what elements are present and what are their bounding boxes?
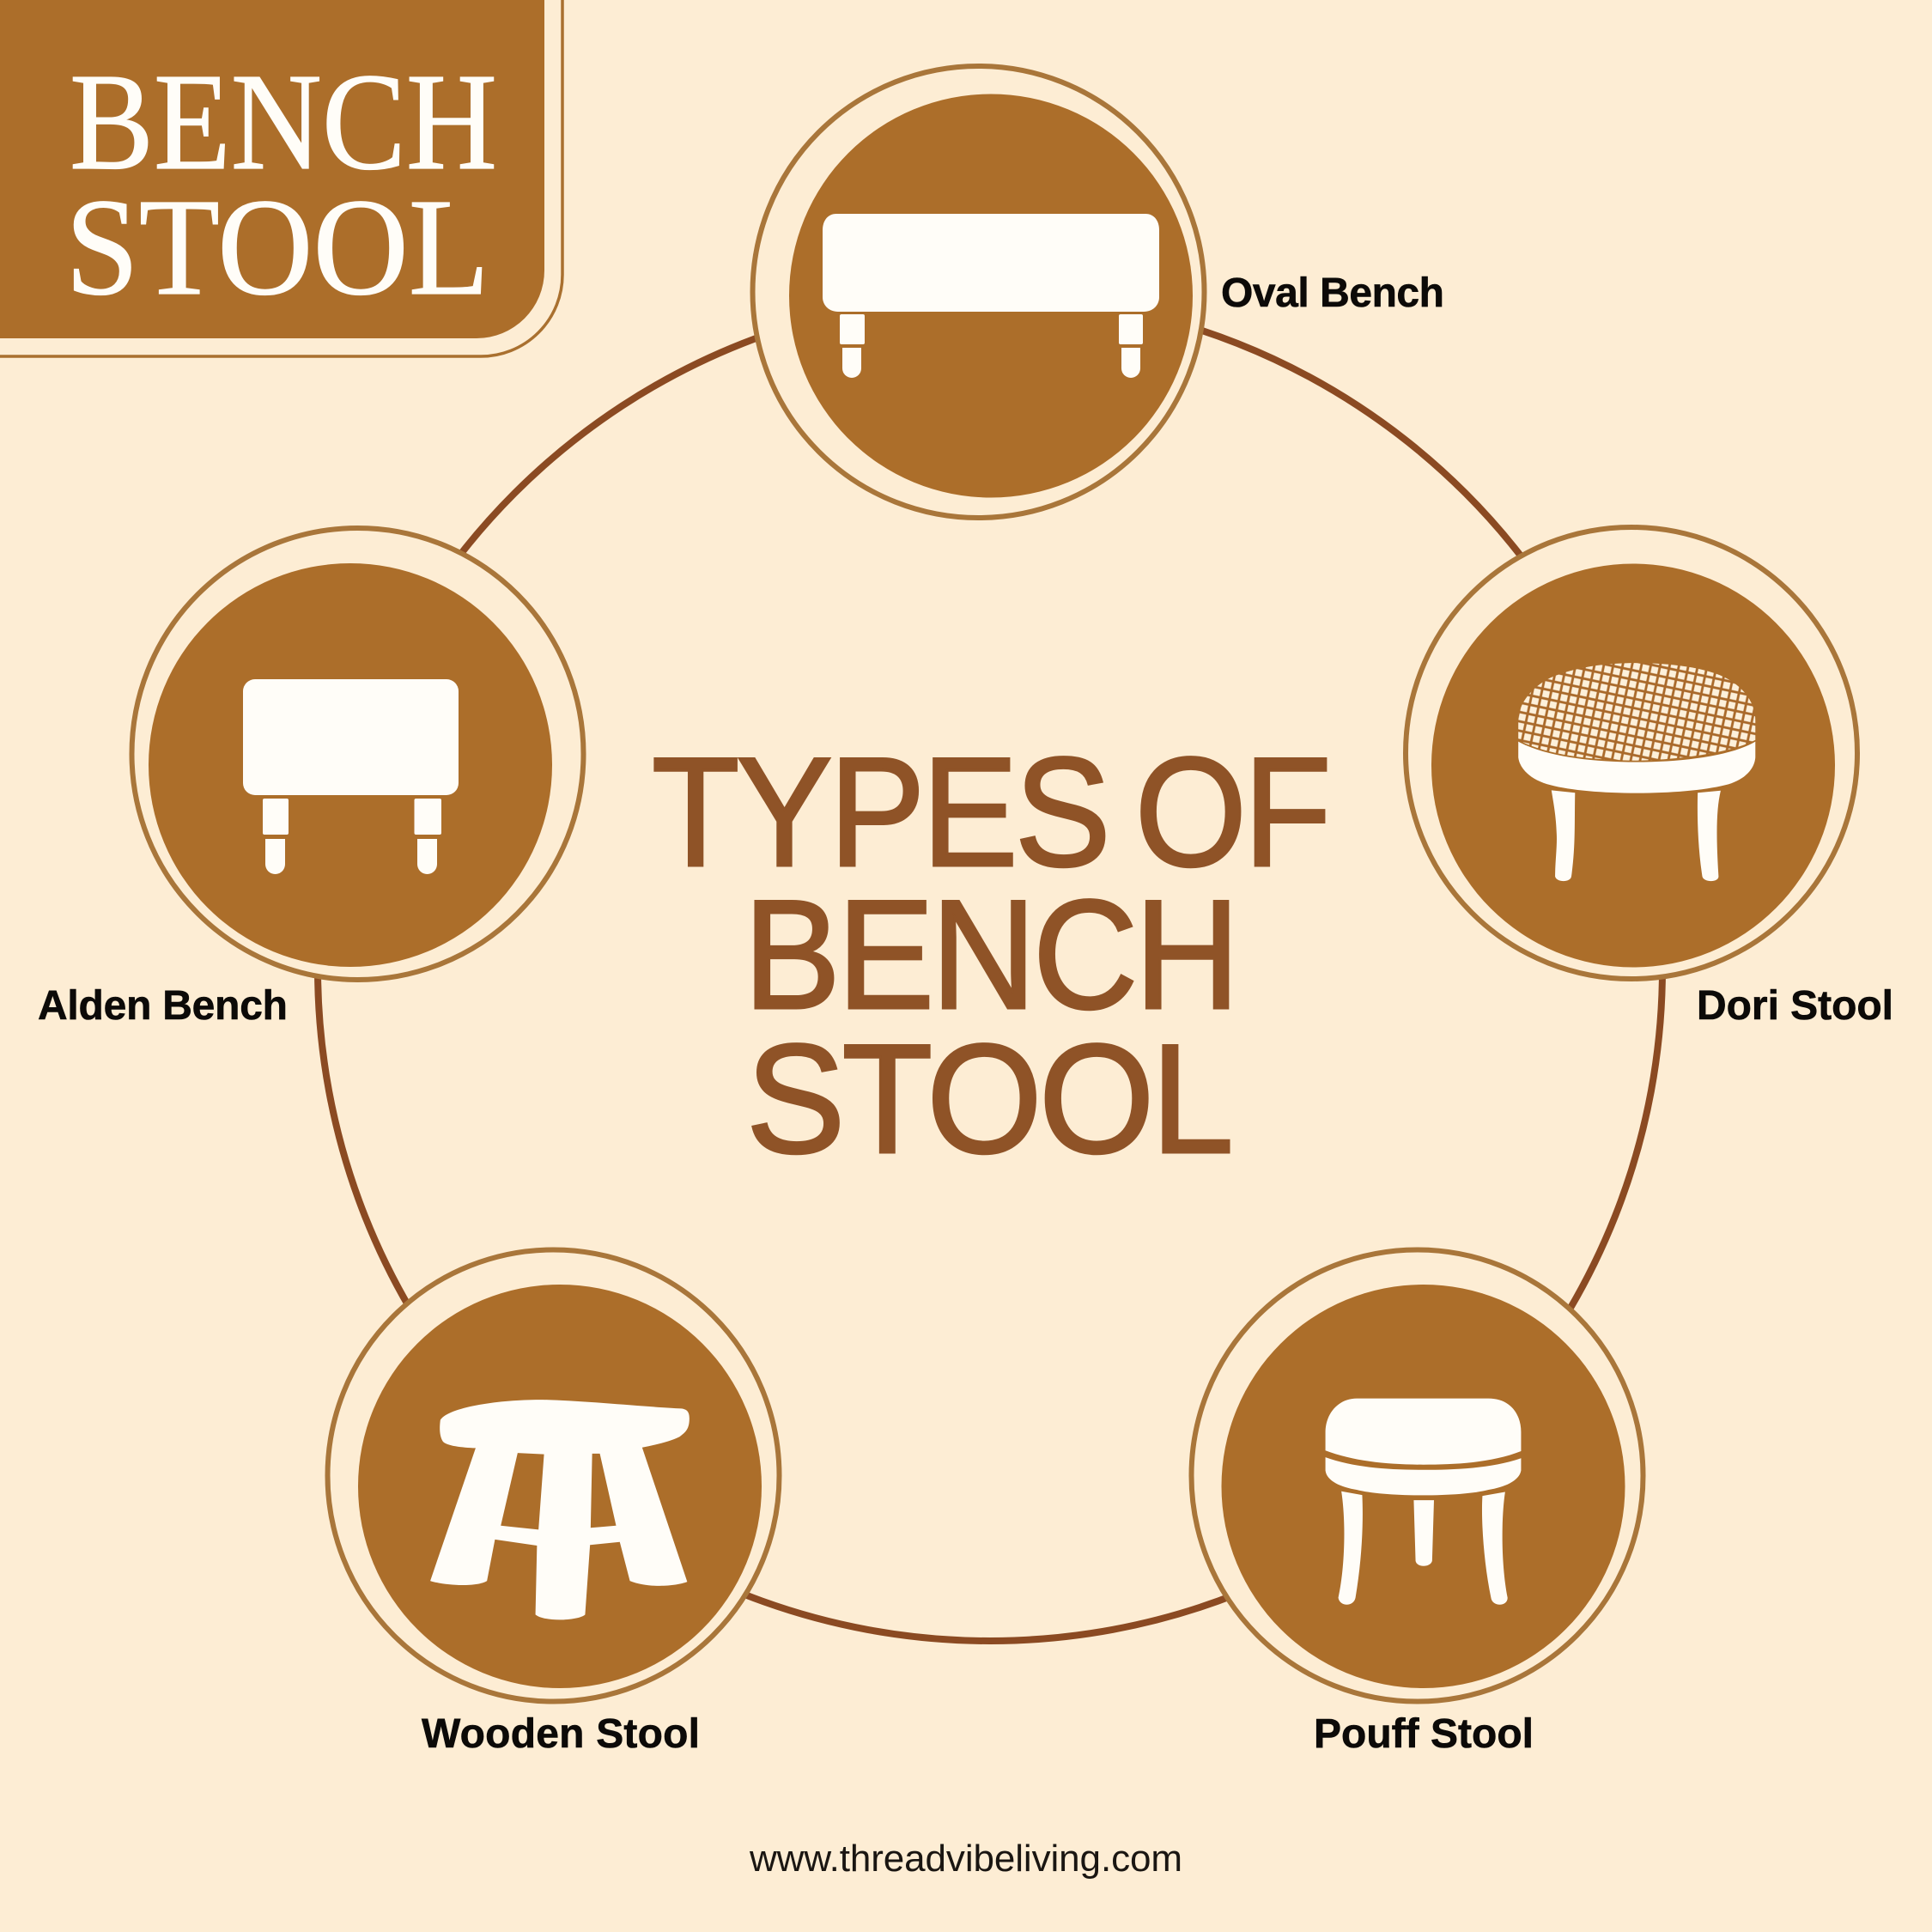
header badge <box>0 0 562 356</box>
label: Dori Stool: Dori Stool <box>1697 983 1893 1029</box>
node: Wooden Stool <box>328 1250 780 1702</box>
disc <box>358 1285 762 1688</box>
disc <box>149 563 552 967</box>
icon: wooden stool <box>430 1400 690 1619</box>
ring <box>1406 527 1857 979</box>
badge panel <box>0 0 544 338</box>
ring <box>132 528 584 980</box>
icon: alden bench <box>243 679 459 874</box>
node: Pouff Stool <box>1192 1250 1643 1702</box>
center title: STOOL <box>746 1012 1230 1186</box>
connecting circle <box>318 296 1662 1641</box>
badge title: BENCH <box>70 46 497 199</box>
badge outline <box>0 0 562 356</box>
disc <box>1431 563 1835 967</box>
icon: dori stool <box>1518 663 1755 881</box>
badge title: STOOL <box>65 171 489 325</box>
label: Pouff Stool: Pouff Stool <box>1314 1711 1534 1757</box>
icon: oval bench <box>823 214 1159 378</box>
ring <box>328 1250 780 1702</box>
node: Oval Bench <box>752 66 1204 518</box>
label: Wooden Stool: Wooden Stool <box>422 1711 700 1757</box>
center title <box>652 726 1328 1186</box>
ring <box>1192 1250 1643 1702</box>
label: Oval Bench: Oval Bench <box>1221 270 1444 316</box>
badge title <box>65 46 497 325</box>
node: Dori Stool <box>1406 527 1857 979</box>
label: Alden Bench: Alden Bench <box>38 983 288 1029</box>
disc <box>789 94 1193 498</box>
woven seat <box>1518 663 1755 761</box>
disc <box>1221 1285 1625 1688</box>
center title: TYPES OF <box>652 726 1328 899</box>
ring <box>752 66 1204 518</box>
center title: BENCH <box>744 868 1236 1042</box>
seat base and legs <box>1518 742 1755 881</box>
node: Alden Bench <box>132 528 584 980</box>
website footer: www.threadvibeliving.com <box>749 1838 1182 1880</box>
icon: pouff stool <box>1326 1399 1521 1605</box>
